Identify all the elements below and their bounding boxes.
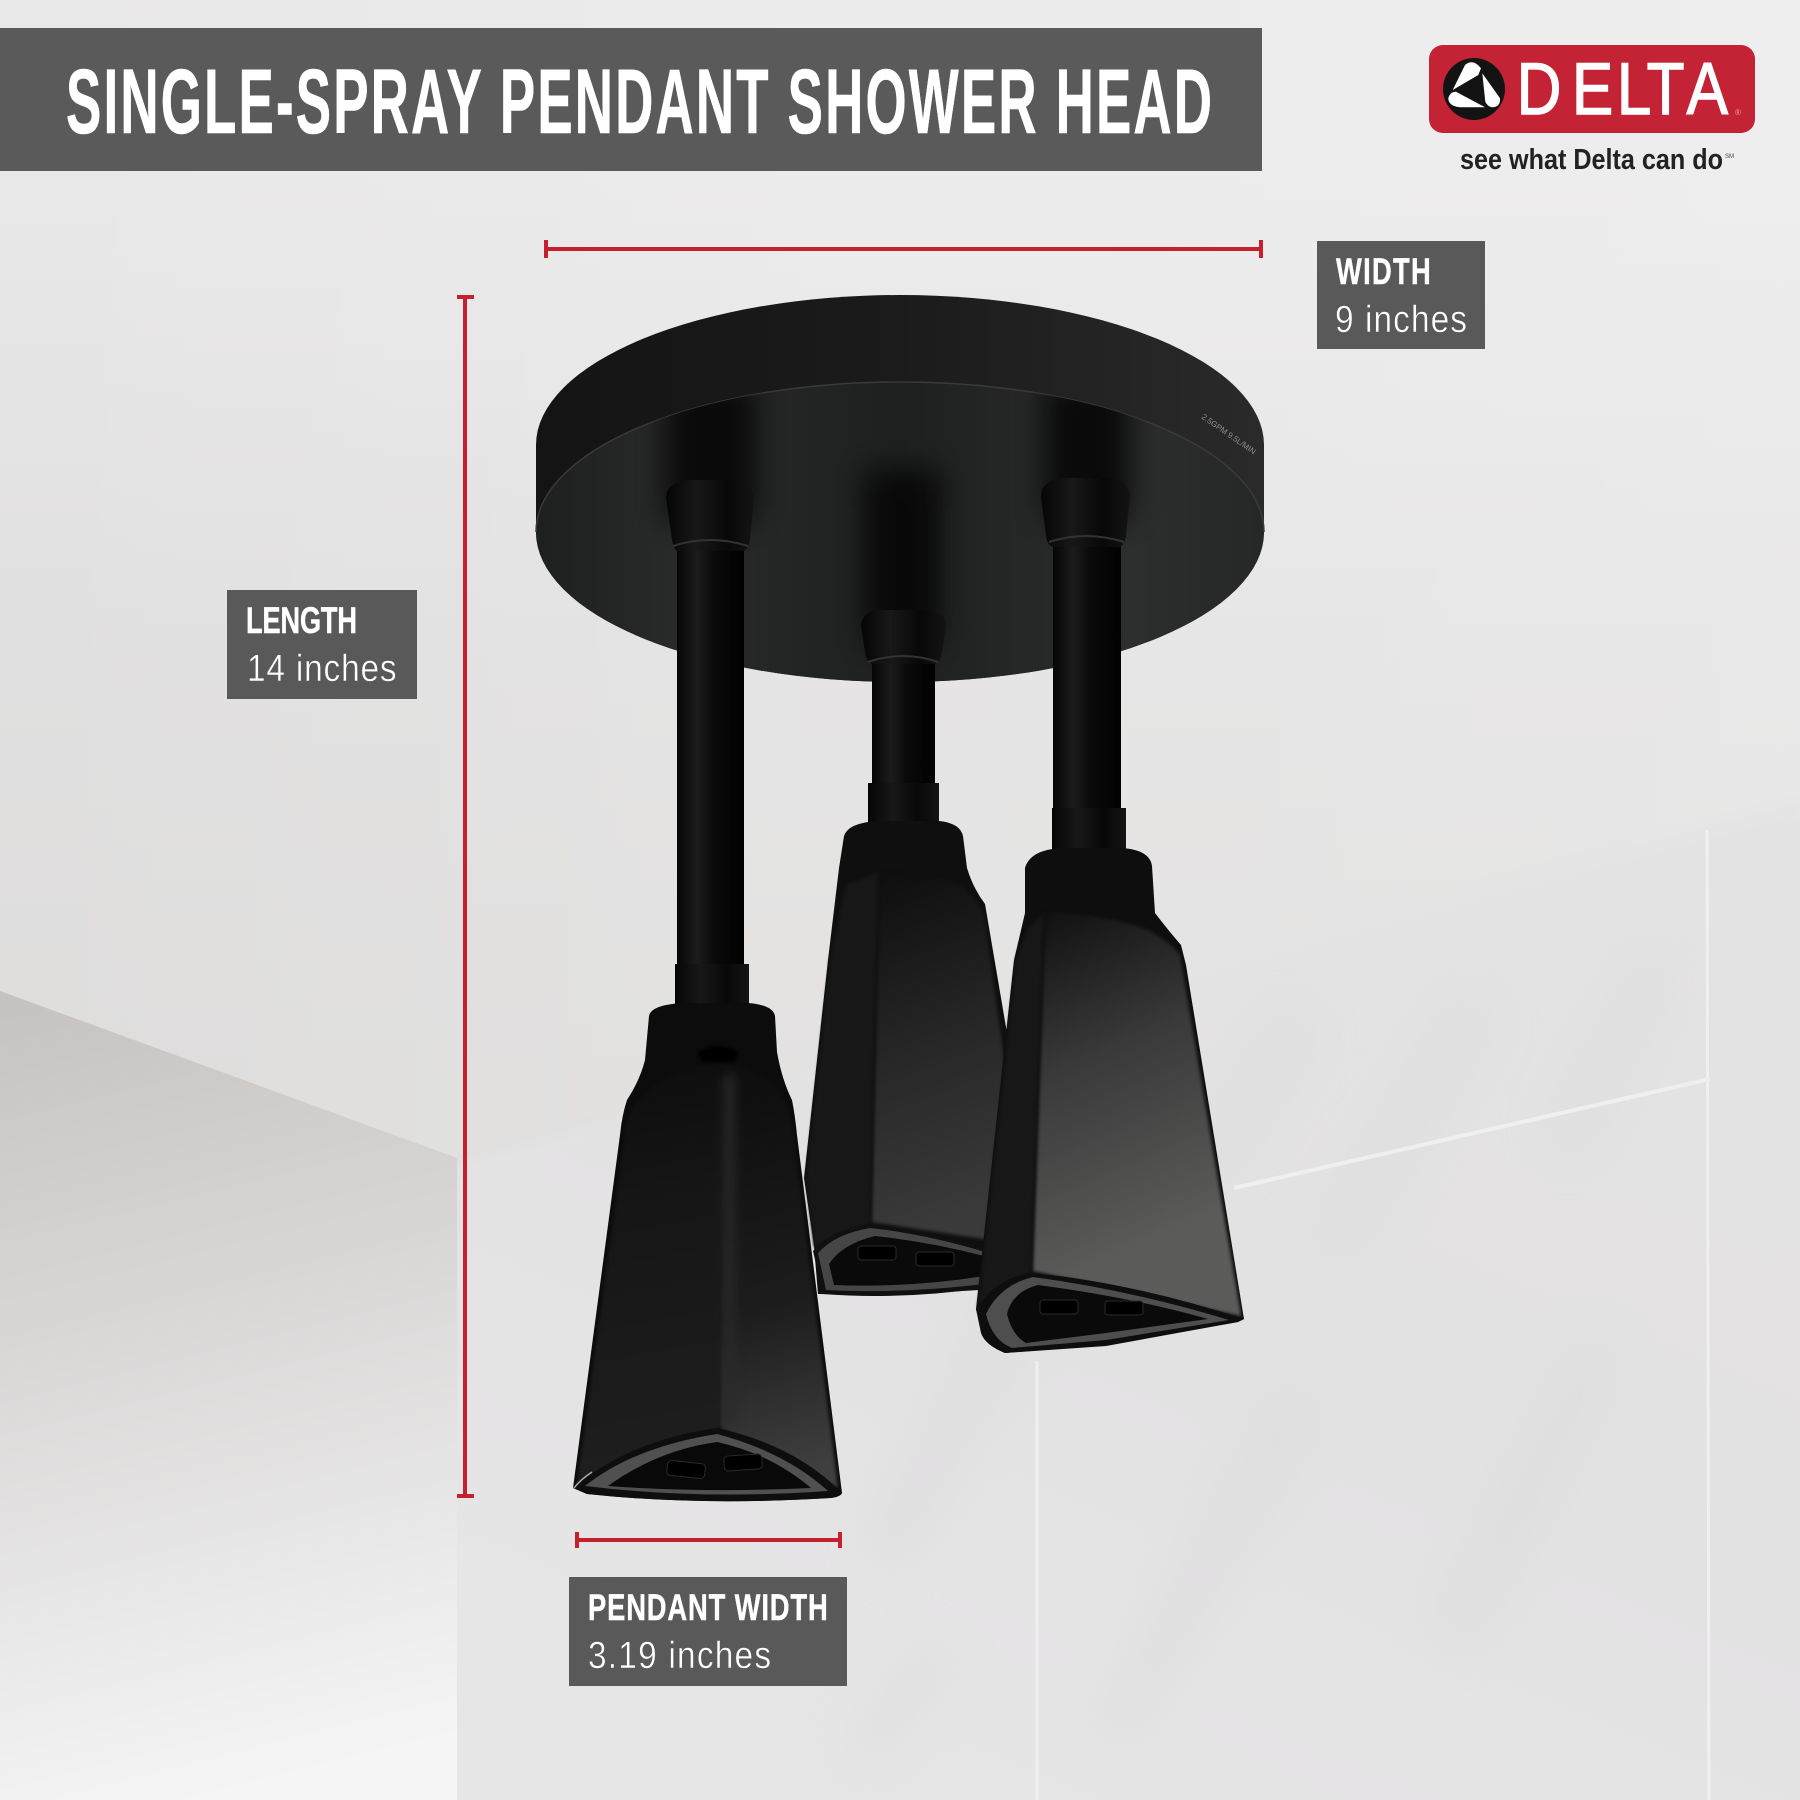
length dimension line: [457, 295, 474, 1498]
width dimension line: [544, 240, 1263, 258]
label: length: LENGTH: [246, 600, 357, 641]
left pendant head: [573, 480, 842, 1501]
ceiling plate center collar: [861, 610, 946, 694]
label: width: 9 inches: [1335, 298, 1467, 340]
registered mark: ®: [1735, 108, 1741, 117]
label: length: 14 inches: [247, 647, 397, 689]
right pendant head: [976, 478, 1244, 1353]
service mark: SM: [1725, 154, 1734, 160]
logo tagline: see what Delta can do: [1460, 144, 1723, 176]
shower head product: [536, 295, 1264, 1501]
ceiling plate: [536, 295, 1264, 682]
label: length: [227, 590, 417, 699]
label: pendant width: PENDANT WIDTH: [588, 1587, 828, 1628]
label: width: WIDTH: [1336, 251, 1431, 292]
plate flow-rate marking: 2.5GPM 9.5L/MIN: [1200, 412, 1258, 456]
logo emblem: [1443, 58, 1505, 120]
Delta logo: [1429, 45, 1755, 176]
pendant width dimension line: [575, 1532, 842, 1548]
back pendant head: [804, 660, 1020, 1296]
logo wordmark: DELTA: [1517, 49, 1729, 130]
label: width: [1317, 241, 1485, 349]
title banner: [0, 28, 1262, 171]
label: pendant width: [569, 1577, 847, 1686]
title text: SINGLE-SPRAY PENDANT SHOWER HEAD: [66, 50, 1212, 153]
label: pendant width: 3.19 inches: [588, 1634, 771, 1676]
